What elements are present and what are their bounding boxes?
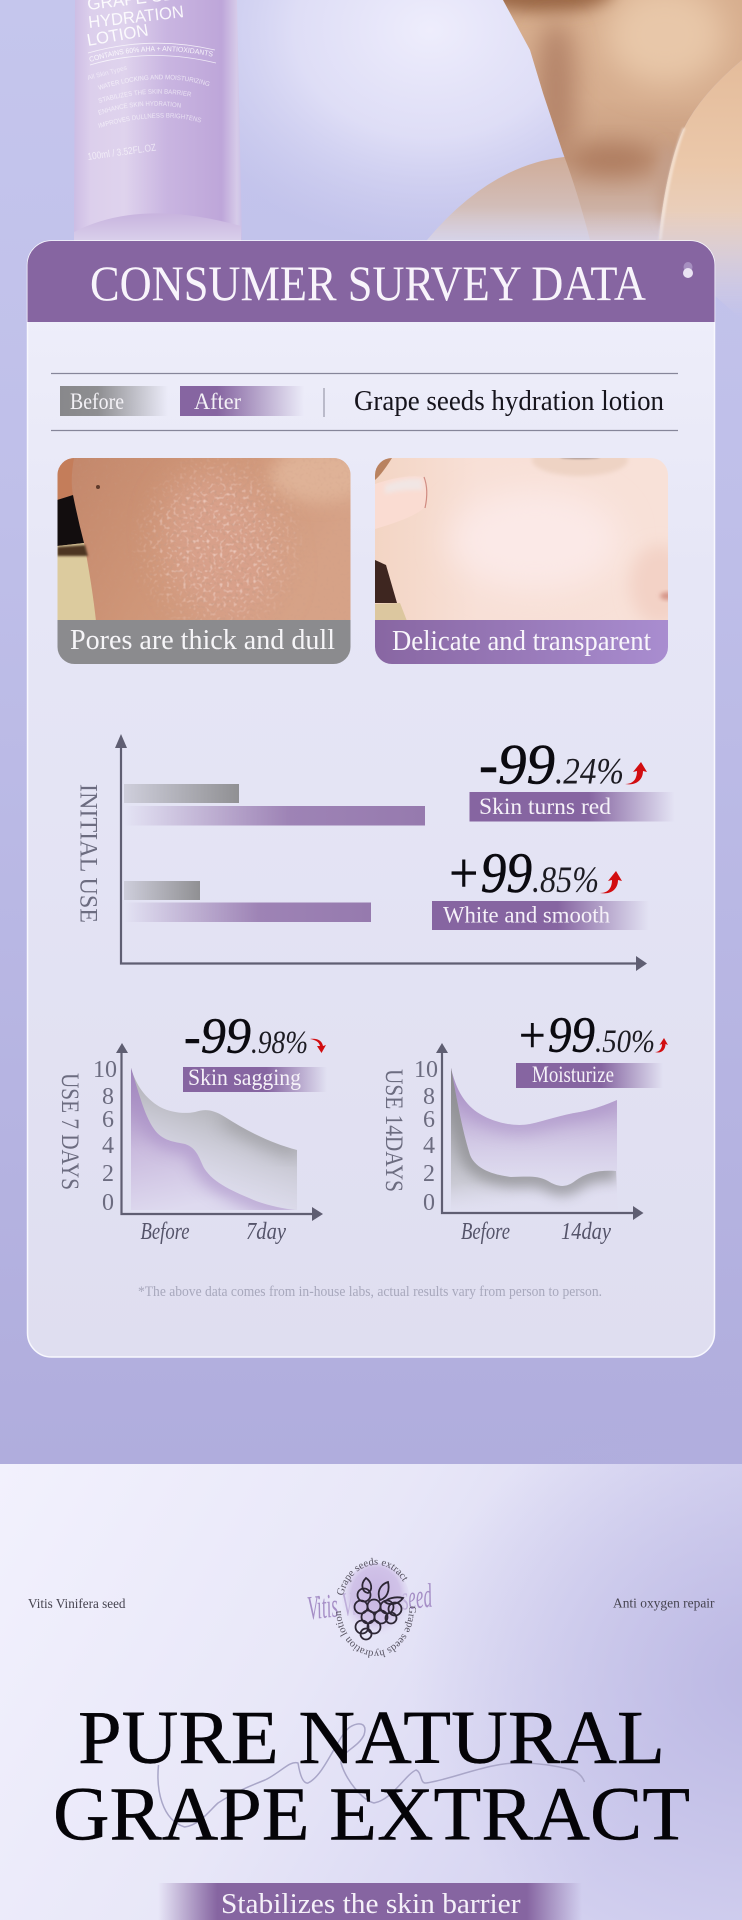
- right ingredient label: Anti oxygen repair: [613, 1596, 715, 1612]
- tube printed label text: STABILIZES THE SKIN BARRIER: [98, 89, 192, 102]
- area chart: use 14 days: [380, 1008, 668, 1245]
- survey card: [28, 241, 714, 1357]
- after photo: smooth skin: [375, 458, 668, 664]
- area chart: use 7 days: [56, 1009, 327, 1245]
- before photo caption: [57, 620, 351, 664]
- y-axis ticks: 8: [423, 1084, 435, 1110]
- bottom banner: [158, 1883, 582, 1920]
- y-axis ticks: 10: [414, 1057, 438, 1083]
- tube printed label text: CONTAINS 60% AHA + ANTIOXIDANTS: [90, 46, 213, 62]
- icon: red up arrow: [600, 871, 622, 893]
- chip: white and smooth: White and smooth: [443, 902, 610, 928]
- signature squiggle: [158, 1724, 584, 1827]
- tube printed label text: ENHANCE SKIN HYDRATION: [98, 101, 181, 115]
- gray area: before: [451, 1068, 618, 1210]
- card header band: [28, 241, 714, 322]
- y-axis ticks: 6: [102, 1107, 114, 1133]
- chip: moisturize: [516, 1062, 663, 1088]
- product tube: [74, 0, 242, 240]
- legend chip: before: Before: [70, 389, 124, 414]
- legend chip: after: [180, 386, 304, 416]
- icon: red down arrow: [310, 1039, 326, 1053]
- y-axis ticks: 4: [102, 1133, 114, 1159]
- circular caption: Grape seeds extract: [337, 1558, 408, 1595]
- x-axis labels: [140, 1219, 286, 1245]
- chip: white and smooth: [432, 901, 649, 930]
- tube printed label text: [85, 0, 216, 163]
- after photo caption: Delicate and transparent: [392, 626, 651, 657]
- y-axis ticks: 2: [423, 1161, 435, 1187]
- after photo caption: [375, 620, 669, 664]
- chip: skin turns red: Skin turns red: [479, 794, 611, 819]
- bars: white and smooth: [124, 881, 371, 922]
- y-axis title: INITIAL USE: [74, 784, 102, 923]
- stat: minus 99.98 percent: .98%: [251, 1025, 308, 1061]
- script signature: Vitis Vinifera seed: [306, 1578, 434, 1627]
- y-axis ticks: [93, 1057, 117, 1216]
- y-axis ticks: 0: [102, 1190, 114, 1216]
- stat: plus 99.50 percent: +99: [516, 1008, 595, 1064]
- y-axis ticks: 4: [423, 1133, 435, 1159]
- stat: plus 99.50 percent: [516, 1008, 655, 1064]
- before photo caption: Pores are thick and dull: [70, 625, 335, 656]
- before photo: rough skin: [58, 458, 350, 664]
- legend row: [51, 374, 678, 430]
- chip: moisturize: Moisturize: [532, 1062, 614, 1087]
- circular caption: [336, 1558, 416, 1658]
- gray area: before: [131, 1068, 297, 1210]
- icon: grape cluster: [354, 1578, 403, 1640]
- icon: red up arrow: [655, 1038, 668, 1053]
- x-axis labels: [461, 1219, 611, 1245]
- bars: skin turns red: [124, 784, 425, 826]
- legend chip: before: [60, 386, 168, 416]
- tube printed label text: HYDRATION: [87, 2, 185, 32]
- x-axis labels: Before: [140, 1219, 190, 1245]
- bar chart: initial use: [74, 734, 674, 971]
- tube printed label text: WATER LOCKING AND MOISTURIZING: [98, 74, 210, 90]
- headline: PURE NATURAL: [78, 1696, 665, 1780]
- y-axis ticks: 6: [423, 1107, 435, 1133]
- pore texture: [138, 459, 297, 620]
- headline: [53, 1696, 690, 1856]
- y-axis ticks: 10: [93, 1057, 117, 1083]
- icon: red up arrow: [625, 762, 647, 784]
- x-axis labels: 7day: [246, 1219, 286, 1245]
- stat: minus 99.24 percent: .24%: [555, 752, 624, 792]
- purple area: after: [451, 1068, 617, 1170]
- circular caption: Grape seeds hydration lotion: [336, 1606, 416, 1658]
- y-axis title: USE 14DAYS: [380, 1069, 407, 1192]
- legend product name: Grape seeds hydration lotion: [354, 386, 664, 417]
- tube printed label text: All Skin Types: [87, 64, 129, 82]
- x-axis labels: Before: [461, 1219, 510, 1245]
- x-axis labels: 14day: [561, 1219, 611, 1245]
- legend chip: after: After: [194, 389, 241, 414]
- grape seed logo: [306, 1558, 434, 1658]
- background: lower section: [0, 1380, 742, 1920]
- stat: plus 99.85 percent: .85%: [532, 860, 599, 901]
- chip: skin sagging: Skin sagging: [188, 1065, 301, 1090]
- axes: [115, 734, 647, 971]
- tube printed label text: IMPROVES DULLNESS BRIGHTENS: [98, 113, 202, 128]
- title: CONSUMER SURVEY DATA: [90, 255, 646, 311]
- footnote: *The above data comes from in-house labs, actual results vary from person to person.: [138, 1284, 602, 1300]
- stat: minus 99.98 percent: [184, 1009, 308, 1065]
- y-axis ticks: 2: [102, 1161, 114, 1187]
- purple area: after: [131, 1068, 297, 1210]
- y-axis ticks: [414, 1057, 438, 1216]
- stat: minus 99.24 percent: [479, 734, 624, 796]
- y-axis ticks: 8: [102, 1084, 114, 1110]
- axes: [116, 1043, 323, 1221]
- stat: plus 99.85 percent: +99: [446, 842, 532, 905]
- tube printed label text: 100ml / 3.52FL.OZ: [87, 142, 157, 163]
- axes: [436, 1043, 644, 1220]
- chip: skin turns red: [470, 792, 674, 822]
- tube printed label text: LOTION: [85, 20, 150, 50]
- model neck and shoulders: [427, 0, 742, 320]
- headline: GRAPE EXTRACT: [53, 1772, 690, 1856]
- bottom banner: Stabilizes the skin barrier: [221, 1889, 521, 1920]
- header dots: [683, 262, 693, 278]
- stat: minus 99.24 percent: -99: [479, 734, 555, 796]
- left ingredient label: Vitis Vinifera seed: [28, 1597, 126, 1612]
- y-axis ticks: 0: [423, 1190, 435, 1216]
- stat: plus 99.50 percent: .50%: [595, 1024, 655, 1060]
- tube shoulder: [74, 213, 241, 241]
- background: upper lavender section: [0, 0, 742, 1464]
- stat: plus 99.85 percent: [446, 842, 599, 905]
- stat: minus 99.98 percent: -99: [184, 1009, 251, 1065]
- y-axis title: USE 7 DAYS: [56, 1073, 83, 1190]
